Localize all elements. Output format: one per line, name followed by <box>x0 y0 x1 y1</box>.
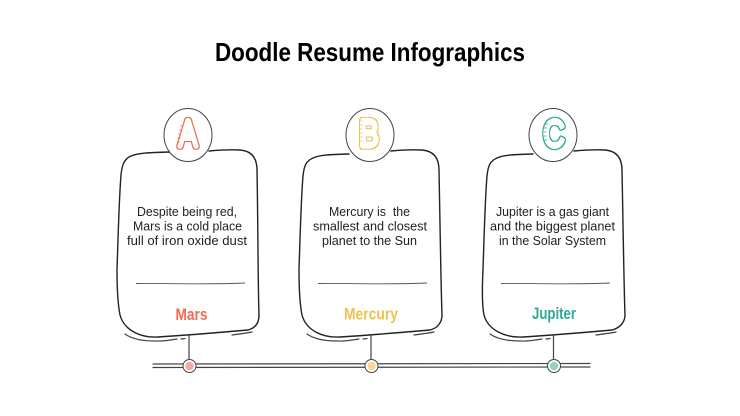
icon: letter C badge <box>529 108 577 162</box>
description: Mercury: planet to the Sun <box>322 234 417 248</box>
description: Jupiter: in the Solar System <box>499 234 606 248</box>
card outline: Jupiter <box>482 150 625 337</box>
icon: letter C badge: C <box>543 113 565 155</box>
icon: letter A badge <box>164 108 212 162</box>
card outline: Mars <box>117 150 259 337</box>
card under-strokes: Mercury <box>307 332 434 341</box>
title: Doodle Resume Infographics <box>215 37 525 67</box>
card outline: Mercury <box>299 150 442 337</box>
icon: letter A badge: A <box>178 114 198 156</box>
card under-strokes: Jupiter <box>490 332 616 341</box>
description: Mars: Mars is a cold place <box>133 220 242 234</box>
description: Jupiter: Jupiter is a gas giant <box>496 205 609 219</box>
name: Mercury: Mercury <box>344 306 399 324</box>
connector and node: Mars <box>183 335 196 372</box>
panel: Jupiter <box>482 108 625 372</box>
connector and node: Jupiter <box>548 335 560 372</box>
panel: Mars <box>117 108 259 372</box>
name: Jupiter: Jupiter <box>532 305 576 323</box>
description: Mars: Despite being red, <box>137 205 237 219</box>
description: Mercury: Mercury is the <box>329 205 410 219</box>
divider: Jupiter <box>501 282 610 285</box>
icon: letter B badge: B <box>359 113 379 155</box>
description: Mercury: smallest and closest <box>313 220 427 234</box>
connector and node: Mercury <box>365 335 378 372</box>
description: Mars: full of iron oxide dust <box>127 234 248 248</box>
icon: letter B badge <box>346 108 394 162</box>
description: Jupiter: and the biggest planet <box>490 220 615 234</box>
divider: Mars <box>136 282 245 285</box>
name: Mars: Mars <box>176 306 208 324</box>
divider: Mercury <box>318 282 427 285</box>
timeline base line <box>153 364 590 368</box>
card under-strokes: Mars <box>125 332 252 341</box>
panel: Mercury <box>299 108 442 372</box>
